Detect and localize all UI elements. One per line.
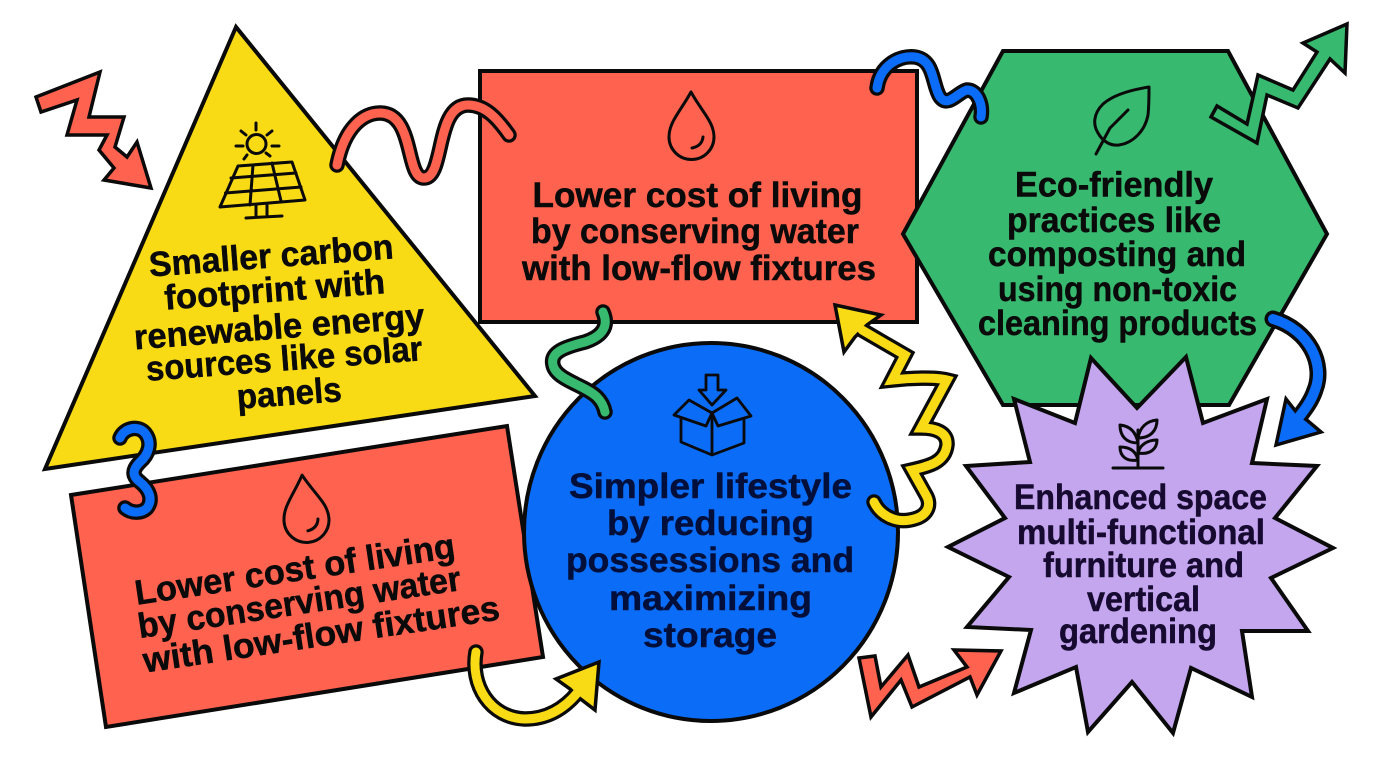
arrow: red zigzag top left <box>36 72 151 188</box>
text: enhanced space: furniture and <box>1043 546 1244 585</box>
text: eco-friendly practices: composting and <box>988 235 1246 274</box>
icon: water drop <box>280 473 331 544</box>
text: enhanced space <box>1014 478 1267 651</box>
panel: lower cost of living (top rectangle) <box>480 71 917 322</box>
text: simpler lifestyle: Simpler lifestyle <box>569 467 852 506</box>
hexagon shape <box>903 51 1327 405</box>
text: enhanced space: Enhanced space <box>1014 478 1267 517</box>
text: enhanced space: vertical <box>1087 580 1200 619</box>
text: smaller carbon footprint: Smaller carbon <box>148 227 395 285</box>
circle shape <box>524 343 898 721</box>
icon: plant <box>1113 420 1163 468</box>
text: lower cost of living: Lower cost of living <box>532 176 862 215</box>
text: smaller carbon footprint: panels <box>235 370 343 417</box>
text: simpler lifestyle: by reducing <box>607 504 814 543</box>
text: smaller carbon footprint <box>133 227 426 417</box>
icon: water drop <box>669 92 714 160</box>
icon: box with down arrow <box>674 375 751 455</box>
text: simpler lifestyle: storage <box>643 616 777 655</box>
text: smaller carbon footprint: footprint with <box>163 262 386 318</box>
panel: lower cost of living (tilted rectangle) <box>71 426 543 727</box>
arrow: yellow zigzag up <box>835 305 947 521</box>
panel: simpler lifestyle (circle) <box>524 343 898 721</box>
rectangle shape <box>480 71 917 322</box>
text: smaller carbon footprint: sources like solar <box>145 329 424 389</box>
text: simpler lifestyle: possessions and <box>566 541 854 580</box>
arrow: red zigzag bottom <box>859 650 1001 717</box>
connector: blue wiggle top <box>877 57 981 117</box>
text: eco-friendly practices: Eco-friendly <box>1015 166 1214 204</box>
icon: solar panel with sun <box>220 123 305 218</box>
text: enhanced space: gardening <box>1059 612 1217 651</box>
text: lower cost of living <box>521 176 876 288</box>
connector: green wiggle <box>553 312 605 412</box>
text: eco-friendly practices: using non-toxic <box>998 270 1237 309</box>
text: eco-friendly practices <box>978 166 1257 343</box>
text: smaller carbon footprint: renewable energy <box>133 297 426 357</box>
starburst shape <box>948 357 1333 733</box>
text: lower cost of living: by conserving water <box>531 212 859 251</box>
text: lower cost of living <box>132 526 502 681</box>
text: simpler lifestyle <box>566 467 854 655</box>
arrow: blue curve right <box>1273 319 1321 445</box>
text: enhanced space: multi-functional <box>1017 513 1265 552</box>
connector: red wave <box>337 105 509 178</box>
text: lower cost of living: by conserving water <box>135 559 464 646</box>
text: lower cost of living: Lower cost of living <box>132 526 457 613</box>
triangle shape <box>45 27 535 469</box>
arrow: yellow curve bottom <box>475 652 599 719</box>
panel: enhanced space (starburst) <box>948 357 1333 733</box>
text: lower cost of living: with low-flow fixtures <box>139 589 502 681</box>
text: eco-friendly practices: practices like <box>1007 201 1221 240</box>
panel: smaller carbon footprint (triangle) <box>45 27 535 469</box>
text: lower cost of living: with low-flow fixtures <box>521 249 876 288</box>
connector: blue wiggle left <box>120 428 150 512</box>
text: simpler lifestyle: maximizing <box>609 579 812 618</box>
icon: leaf <box>1095 87 1149 154</box>
panel: eco-friendly practices (hexagon) <box>903 51 1327 405</box>
arrow: green zigzag top right <box>1211 24 1347 143</box>
tilted rectangle shape <box>71 426 543 727</box>
text: eco-friendly practices: cleaning products <box>978 304 1257 343</box>
